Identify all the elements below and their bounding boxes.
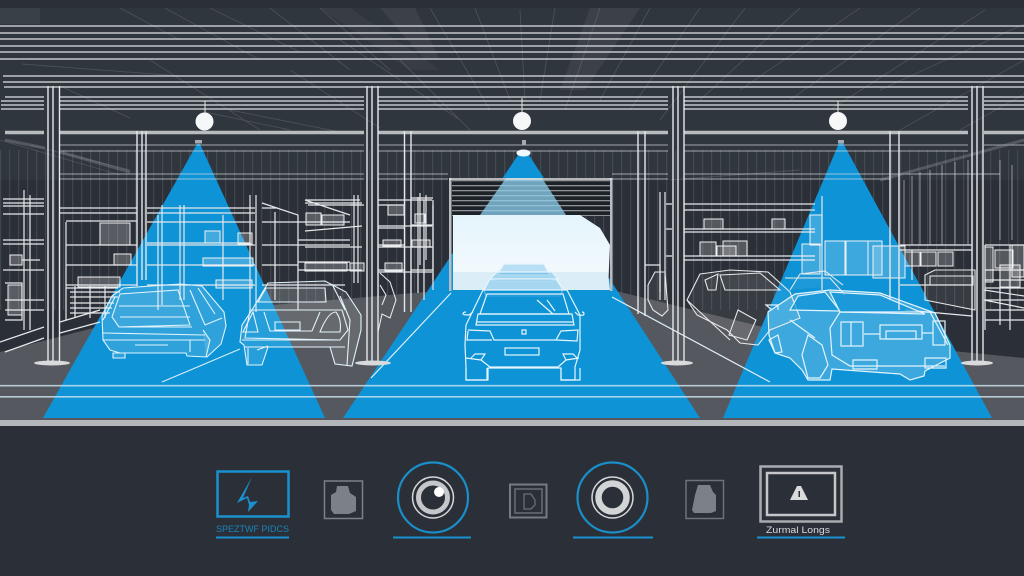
loading door (449, 178, 612, 291)
background car left (378, 273, 396, 332)
boxes on left shelves (8, 205, 430, 315)
background cars right (648, 270, 975, 345)
car: left rear view (102, 284, 226, 358)
icon: camera ring (578, 462, 648, 532)
icon: monitor with lightning bolt (216, 472, 289, 535)
light cone left (43, 144, 325, 418)
light cone centre (343, 152, 700, 418)
structural columns (48, 86, 983, 363)
icon: stack box 1 (324, 481, 362, 518)
ceiling lamp centre (513, 98, 531, 156)
blue underline 4 (757, 536, 845, 538)
blue underline 3 (573, 536, 653, 538)
ceiling beams (0, 26, 1024, 180)
car: second rear view (240, 281, 361, 366)
shelving centre (305, 197, 433, 300)
light cone right (723, 143, 992, 418)
icon: warning screen (760, 466, 842, 536)
icon: camera lens with highlight (398, 462, 468, 532)
icon: stack box 2 (686, 480, 724, 518)
ceiling (0, 8, 1024, 180)
ceiling lamp left (195, 101, 214, 144)
label under monitor: SPEZTWF PIDCS (216, 524, 289, 535)
cars queue behind (484, 264, 562, 296)
column bases (34, 360, 993, 366)
shelving left (0, 190, 433, 352)
blue underline 2 (393, 536, 471, 538)
ceiling lamp right (829, 101, 847, 144)
car: centre front view (463, 290, 584, 380)
icon: square module (510, 484, 546, 518)
floor lane lines (0, 293, 1024, 397)
control panel (0, 426, 1024, 576)
boxes on right shelves (700, 215, 1024, 287)
floor edge rail (0, 420, 1024, 426)
label under warning screen: Zurmal Longs (766, 525, 830, 536)
warehouse floor (0, 290, 1024, 420)
shelving right (645, 160, 1024, 330)
car: right rear three-quarter (766, 290, 950, 380)
blue underline 1 (216, 536, 289, 538)
back wall (0, 150, 1024, 310)
